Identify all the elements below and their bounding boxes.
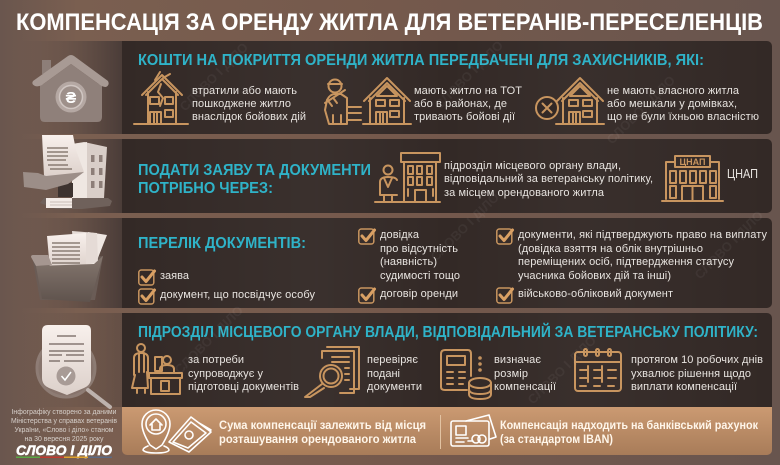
panel: documents list — [12, 218, 772, 308]
icon: escort at desk — [132, 344, 182, 394]
panel: key notes — [122, 407, 772, 455]
text: determine size: визначає — [494, 354, 541, 366]
watermarks: СЛОВО І ДІЛО — [172, 303, 246, 377]
watermarks: СЛОВО І ДІЛО — [177, 40, 251, 114]
text: housing in occupied areas: мають житло на ТОТ — [414, 85, 522, 97]
icon: bank card — [451, 415, 496, 446]
icon: official and building — [375, 153, 440, 202]
text: paid to bank account: Компенсація надходить на банківський рахунок — [500, 420, 758, 432]
panel: who is eligible — [12, 41, 772, 134]
panel heading: eligible: КОШТИ НА ПОКРИТТЯ ОРЕНДИ ЖИТЛА ПЕРЕДБАЧЕНІ ДЛЯ ЗАХИСНИКІВ, ЯКІ: — [138, 52, 704, 69]
checklist: column 2 — [359, 229, 460, 303]
text: check documents — [367, 354, 422, 393]
watermarks: СЛОВО І ДІЛО — [692, 208, 766, 282]
checklist: column 3: учасника бойових дій та інші) — [518, 270, 671, 282]
checklist: column 1: документ, що посвідчує особу — [160, 289, 316, 301]
text: source credits: Міністерства у справах ветеранів — [11, 417, 117, 425]
text: no own housing: що не були їхньою власністю — [607, 111, 759, 123]
icon: no own house — [536, 78, 604, 124]
panel heading: apply: ПОТРІБНО ЧЕРЕЗ: — [138, 180, 273, 197]
logo: Слово і діло: СЛОВО І ДІЛО — [16, 443, 113, 458]
checklist: column 1 — [139, 270, 316, 304]
text: damaged housing: втратили або мають — [192, 85, 297, 97]
text: accompany: підготовці документів — [188, 381, 299, 393]
panel heading: apply: ПОДАТИ ЗАЯВУ ТА ДОКУМЕНТИ — [138, 162, 371, 179]
text: local authority unit — [444, 160, 653, 199]
text: paid to bank account — [500, 420, 758, 446]
icon: location pin and banknotes — [142, 410, 211, 453]
text: decision term: протягом 10 робочих днів — [631, 354, 763, 366]
checklist: column 3: (довідка взяття на облік внутрішньо — [518, 243, 703, 255]
checklist: column 2: (наявність) — [380, 256, 437, 268]
text: accompany: за потреби — [188, 354, 244, 366]
text: amount depends on location — [219, 420, 426, 446]
icon: calculator and coins — [441, 350, 491, 399]
text: accompany — [188, 354, 299, 393]
text: damaged housing: внаслідок бойових дій — [192, 111, 306, 123]
text: local authority unit: підрозділ місцевого органу влади, — [444, 160, 621, 172]
watermarks — [172, 38, 766, 407]
text: housing in occupied areas — [414, 85, 522, 123]
text: check documents: перевіряє — [367, 354, 418, 366]
icon: TsNAP building — [662, 156, 723, 201]
watermarks: СЛОВО І ДІЛО — [525, 333, 599, 407]
text: no own housing: або мешкали у домівках, — [607, 98, 737, 110]
text: decision term: виплати компенсації — [631, 381, 737, 393]
checklist: column 3: документи, які підтверджують право на виплату — [518, 229, 768, 241]
text: TsNAP: ЦНАП — [727, 167, 758, 181]
icon: soldier and house — [325, 78, 411, 124]
text: source credits: на 30 вересня 2025 року — [24, 436, 104, 443]
text: source credits — [11, 408, 117, 443]
watermarks: СЛОВО І ДІЛО — [432, 38, 506, 112]
text: accompany: супроводжує у — [188, 368, 264, 380]
icon: damaged house — [134, 72, 188, 124]
text: determine size — [494, 354, 556, 393]
text: damaged housing — [192, 85, 306, 123]
icon: document and building — [23, 135, 112, 209]
checklist: column 3: військово-обліковий документ — [518, 288, 673, 300]
watermarks: СЛОВО І ДІЛО — [604, 73, 678, 147]
icon: document check with magnifier — [305, 347, 359, 397]
text: no own housing: не мають власного житла — [607, 85, 740, 97]
text: paid to bank account: (за стандартом IBAN) — [500, 434, 613, 446]
text: source credits: Інфографіку створено за даними — [12, 408, 117, 416]
text: damaged housing: пошкоджене житло — [192, 98, 291, 110]
icon: house with hryvnia — [32, 55, 109, 122]
panel heading: documents: ПЕРЕЛІК ДОКУМЕНТІВ: — [138, 235, 306, 252]
watermarks: СЛОВО І ДІЛО — [428, 190, 502, 264]
checklist: column 3 — [497, 229, 768, 303]
icon: document under magnifier — [37, 325, 110, 407]
panel: where to apply — [12, 135, 772, 213]
text: local authority unit: за місцем орендованого житла — [444, 187, 605, 199]
checklist: column 2: судимості тощо — [380, 270, 460, 282]
text: local authority unit: відповідальний за ветеранську політику, — [444, 173, 653, 185]
text: check documents: документи — [367, 381, 422, 393]
text: housing in occupied areas: тривають бойові дії — [414, 111, 515, 123]
icon: folder with papers — [31, 231, 107, 302]
icon: calendar — [575, 349, 621, 391]
icon: TsNAP building: ЦНАП — [680, 157, 706, 167]
text: decision term: ухвалює рішення щодо — [631, 368, 751, 380]
text: no own housing — [607, 85, 759, 123]
checklist: column 2: договір оренди — [380, 288, 458, 300]
text: amount depends on location: розташування орендованого житла — [219, 434, 417, 446]
checklist: column 2: довідка — [380, 229, 420, 241]
panel heading: apply — [138, 162, 371, 197]
text: decision term — [631, 354, 763, 393]
text: source credits: України, «Слово і діло» станом — [14, 426, 114, 434]
text: determine size: компенсації — [494, 381, 556, 393]
text: housing in occupied areas: або в районах, де — [414, 98, 507, 110]
checklist: column 3: переміщених осіб, підтвердження статусу — [518, 256, 734, 268]
icon: house with hryvnia: ₴ — [66, 90, 77, 107]
panel: authority actions — [12, 313, 772, 407]
checklist: column 1: заява — [160, 270, 190, 282]
text: amount depends on location: Сума компенсації залежить від місця — [219, 420, 426, 432]
text: check documents: подані — [367, 368, 400, 380]
checklist: column 2: про відсутність — [380, 243, 458, 255]
text: determine size: розмір — [494, 368, 528, 380]
